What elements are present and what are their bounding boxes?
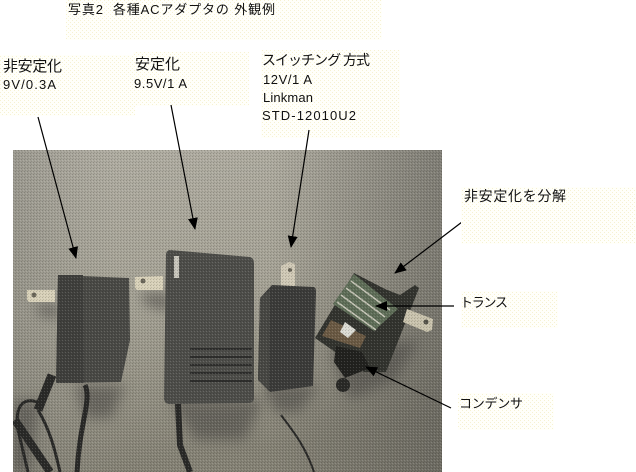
- label: capacitor: [458, 393, 554, 430]
- label: disassembled: 非安定化を分解: [464, 188, 566, 204]
- label: regulated adapter: 安定化: [135, 56, 180, 73]
- adapter 1: unregulated: [27, 275, 130, 383]
- label: switching adapter: Linkman: [263, 90, 313, 105]
- title: [66, 0, 382, 40]
- label: capacitor: コンデンサ: [459, 396, 523, 411]
- label: disassembled: [461, 187, 636, 244]
- arrow: unregulated: [38, 117, 76, 258]
- label: unregulated adapter: 非安定化: [3, 58, 62, 75]
- label: transformer: [460, 291, 558, 328]
- label: regulated adapter: [133, 52, 249, 106]
- label: switching adapter: STD-12010U2: [262, 108, 356, 123]
- disassembled adapter: [315, 273, 433, 392]
- adapter 3: switching: [258, 262, 316, 392]
- label: transformer: トランス: [460, 295, 508, 310]
- label: unregulated adapter: 9V/0.3A: [3, 77, 56, 92]
- arrow: transformer: [376, 305, 454, 307]
- arrow: regulated: [171, 105, 195, 229]
- label: switching adapter: [261, 50, 400, 138]
- label: regulated adapter: 9.5V/1 A: [134, 76, 187, 91]
- power cords: [15, 375, 314, 472]
- label: switching adapter: スイッチング 方式: [262, 52, 370, 68]
- arrow: capacitor: [366, 367, 451, 408]
- adapter 2: regulated: [135, 250, 254, 404]
- label: switching adapter: 12V/1 A: [263, 72, 312, 87]
- arrow: disassembled: [395, 222, 462, 273]
- photo of AC adapters: [13, 150, 442, 472]
- title: 写真2 各種ACアダプタの 外観例: [68, 2, 275, 17]
- label: unregulated adapter: [0, 55, 135, 116]
- arrow: switching: [291, 130, 309, 247]
- shadows: [13, 293, 420, 472]
